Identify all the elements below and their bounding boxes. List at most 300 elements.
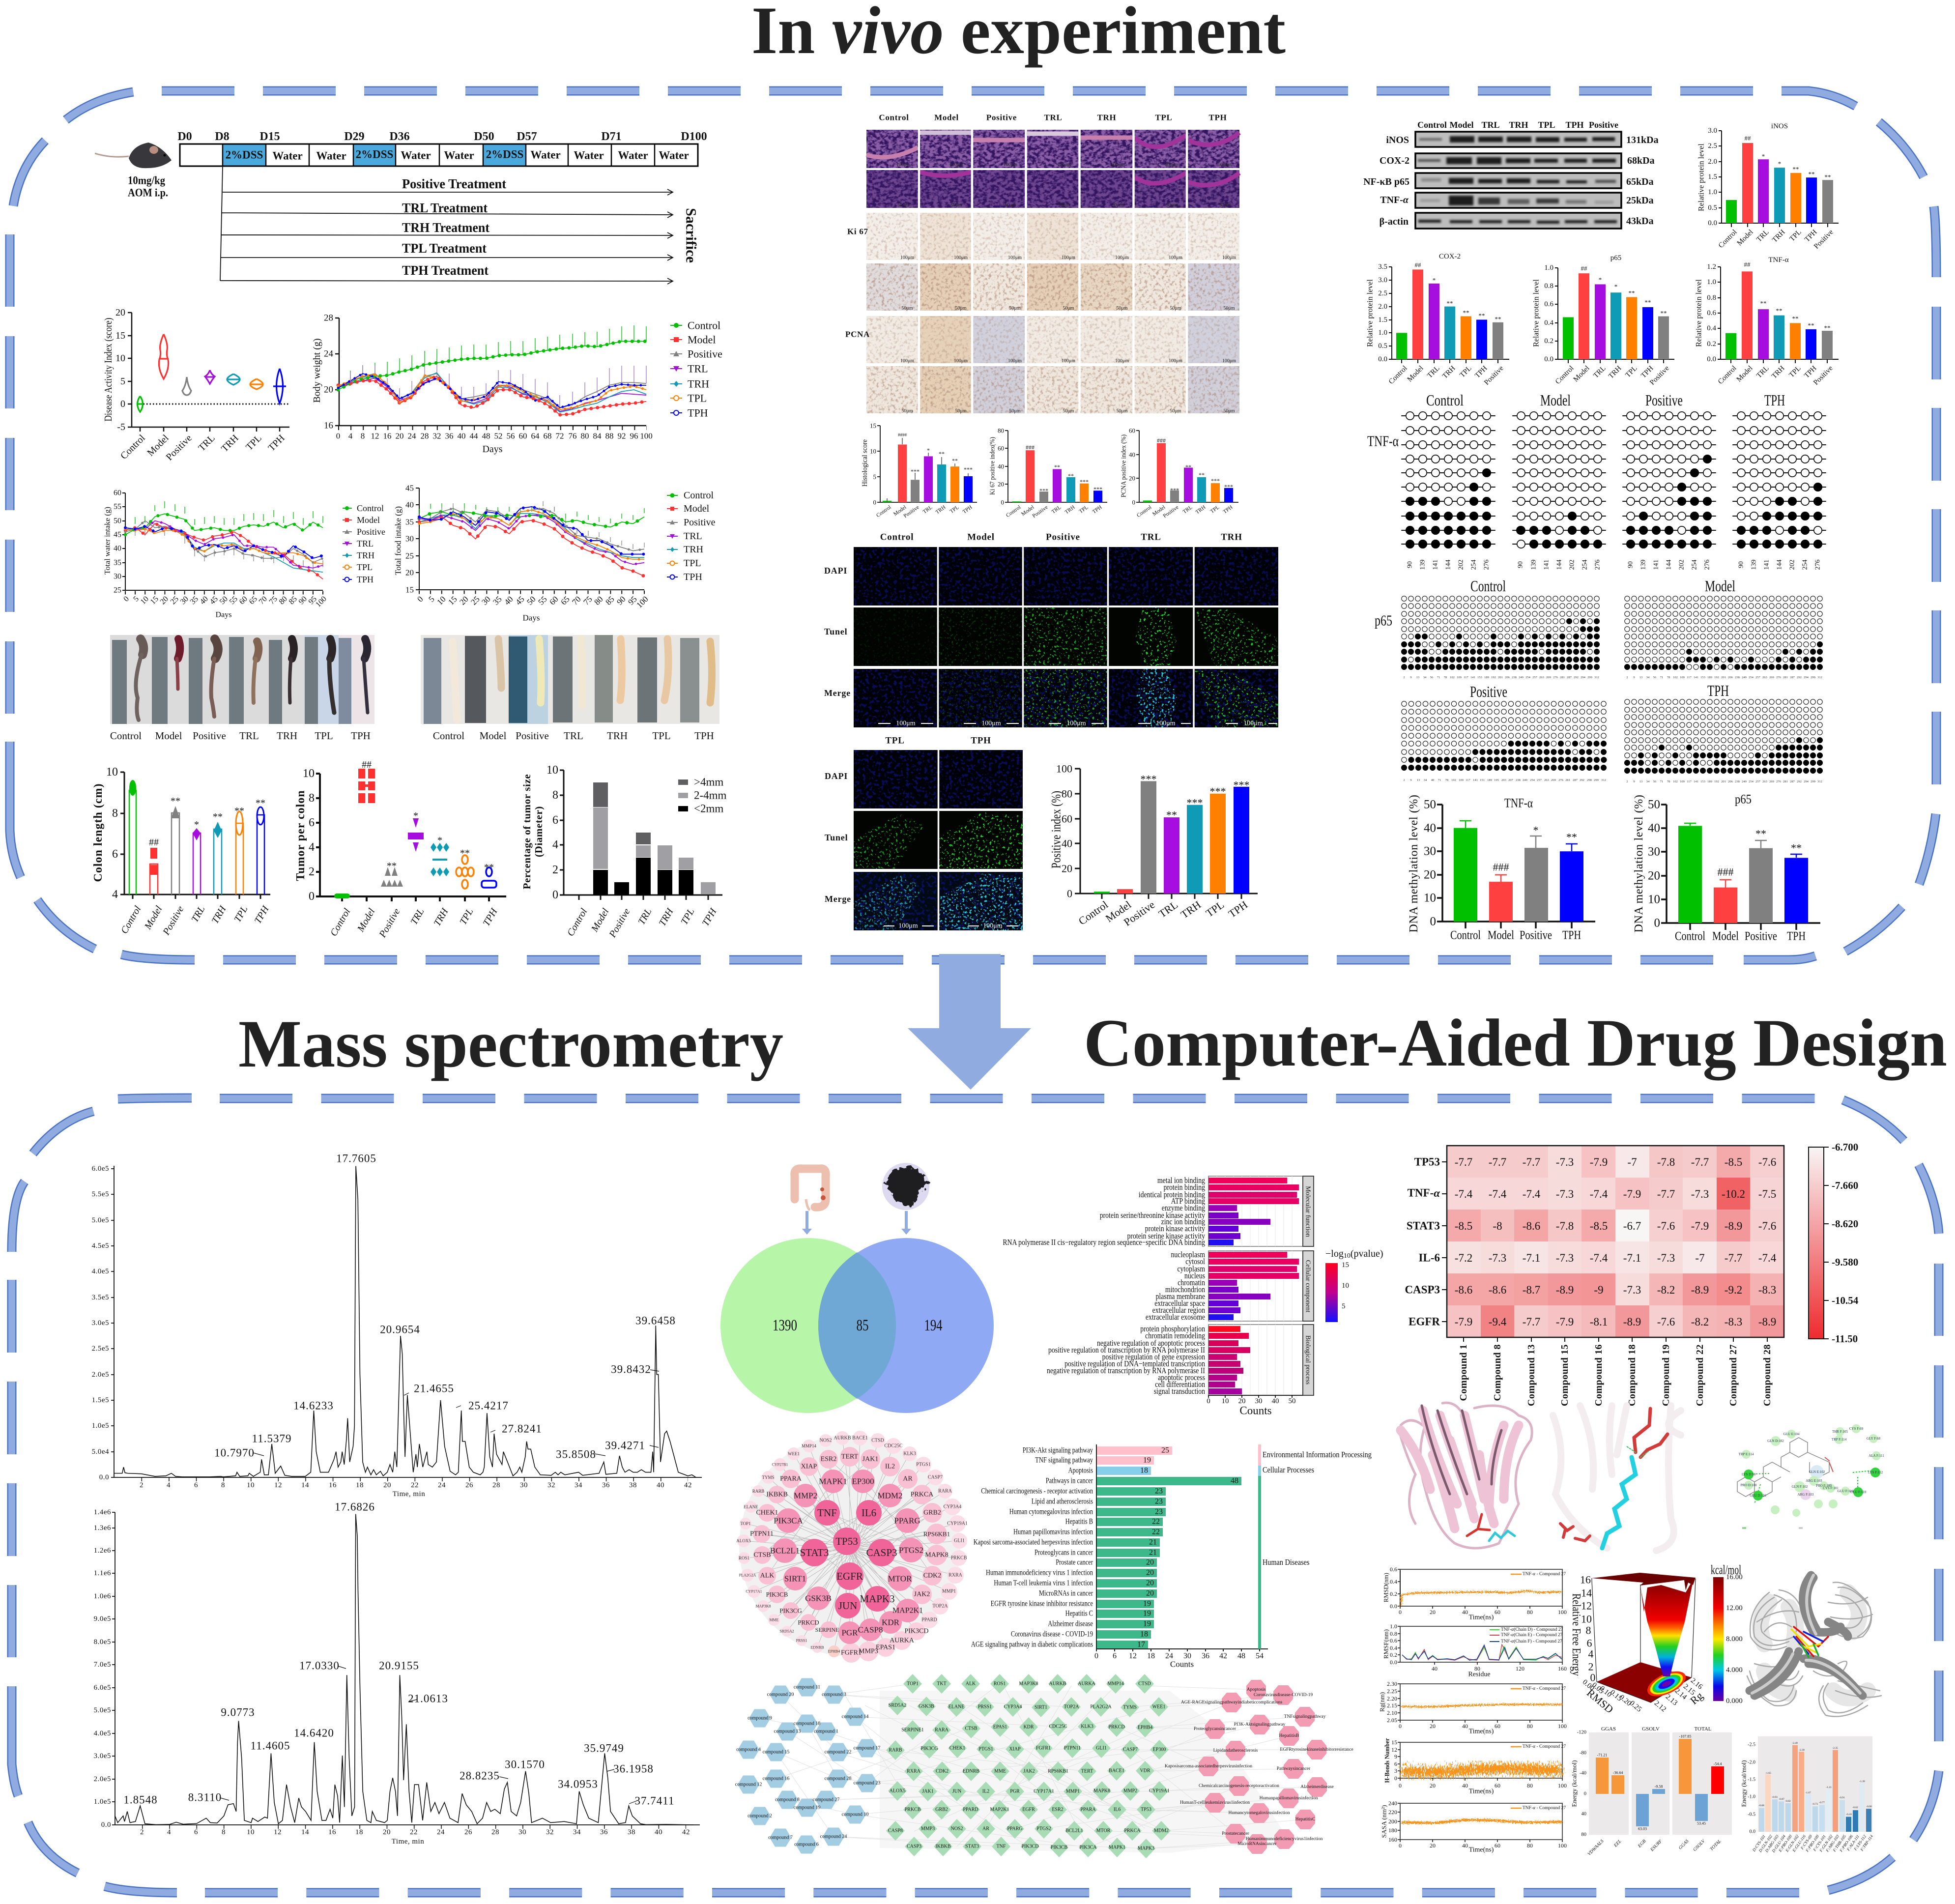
chart: body weight: 60 <box>519 432 527 440</box>
chart: per-residue energy decomposition: Energy (kcal/mol) <box>1740 1760 1748 1807</box>
panel: TUNEL fluorescence images, five groups: TRL <box>1141 532 1161 543</box>
chart: iNOS relative protein: ** <box>1824 173 1831 181</box>
chart: p65 relative protein: 1.0 <box>1544 264 1553 272</box>
chart: per-residue energy decomposition: F:CYS-69 <box>1799 1834 1813 1851</box>
chart: TNF-α DNA methylation level: Positive <box>1520 929 1552 942</box>
cell values: -8.3 <box>1725 1315 1742 1328</box>
chart: GO enrichment: Molecular function <box>1304 1186 1312 1237</box>
network: protein–protein interaction: JAK2 <box>914 1590 930 1598</box>
Venn diagram of targets: 1390 <box>773 1317 797 1334</box>
network: compound–target–pathway: ALK <box>966 1681 976 1687</box>
chart: body weight: 20 <box>395 432 404 440</box>
timeline bar: 2%DSS <box>356 148 393 160</box>
network: compound–target–pathway: PRKCD <box>1108 1724 1125 1730</box>
network: compound–target–pathway: GRB2 <box>935 1807 948 1813</box>
chart: SASA: 80 <box>1527 1842 1533 1849</box>
network: compound–target–pathway: PPARD <box>963 1807 978 1813</box>
chart: per-residue energy decomposition: -0.87 <box>1779 1798 1784 1801</box>
chart: colon length: TRL <box>189 904 207 924</box>
heatmap cells <box>1447 1146 1784 1337</box>
chart: p65 DNA methylation level: 0 <box>1654 916 1660 930</box>
chart: positive index: TPH <box>1226 898 1250 920</box>
column headers: TPL <box>1155 113 1173 122</box>
chart: Rg: 20 <box>1430 1723 1436 1730</box>
2D interaction diagram: CYS F:69 <box>1849 1427 1864 1431</box>
panel: western blots: Positive <box>1589 120 1618 130</box>
chart: Rg: 2.30 <box>1387 1680 1397 1687</box>
legend: food: TRH <box>684 544 703 555</box>
chart: p65 DNA methylation level: 40 <box>1648 822 1660 835</box>
site tick labels: 263 <box>1762 779 1767 783</box>
panel: western blots: COX-2 <box>1380 155 1409 166</box>
chart: GO enrichment: extracellular region <box>1152 1306 1205 1315</box>
chart: histological score: TPL <box>949 504 960 515</box>
chart: histological score: Control <box>875 504 892 519</box>
column labels: Compound 28 <box>1762 1344 1773 1406</box>
site tick labels: 13 <box>1639 675 1642 679</box>
values: 48 <box>1231 1476 1238 1485</box>
2D interaction diagram: ARG E:103 <box>1806 1479 1822 1483</box>
site tick labels: 269 <box>1551 779 1556 781</box>
network: protein–protein interaction: RPS6KB1 <box>923 1530 950 1537</box>
site tick labels: 276 <box>1553 675 1558 679</box>
chart: total food intake: 95 <box>626 594 639 607</box>
chart: TNF-α relative protein: 0.4 <box>1707 324 1716 332</box>
chart: MM/PBSA energy components: 0 <box>1584 1791 1586 1797</box>
chart: PCNA positive index: Positive <box>1162 504 1180 519</box>
panel: western blots: TRH <box>1509 120 1528 130</box>
network: compound–target–pathway: MDM2 <box>1154 1828 1169 1833</box>
site tick labels: 34 <box>1646 675 1650 679</box>
chart: TNF-α relative protein: Relative protein level <box>1695 279 1703 347</box>
chart: tumor size stacked bars: Control <box>565 906 590 938</box>
chart: total water intake: 70 <box>258 595 269 606</box>
peak labels: 14.6420 <box>294 1727 334 1739</box>
chart: total water intake: 5 <box>132 595 141 604</box>
chart: tumor per colon: 0 <box>309 890 315 903</box>
CpG site labels: 90 <box>1407 561 1413 568</box>
chart: free energy landscape: Relative Free Energy <box>1570 1593 1582 1676</box>
cell values: -8.2 <box>1691 1315 1709 1328</box>
peak labels: 17.6826 <box>335 1501 375 1513</box>
network: compound–target–pathway: EDNRB <box>963 1768 979 1774</box>
chart: free energy landscape: Rg <box>1688 1689 1705 1707</box>
network: compound–target–pathway: ELANE <box>949 1704 964 1709</box>
chart: disease activity index violin: Model <box>145 433 171 459</box>
network: compound–target–pathway: EP300 <box>1153 1747 1166 1753</box>
scale text: 50μm <box>897 202 909 207</box>
chart: tumor per colon <box>294 759 506 940</box>
chart: Ki 67 positive index: ** <box>1068 472 1074 479</box>
site tick labels: 192 <box>1714 675 1719 679</box>
2D interaction diagram: TRP E:114 <box>1739 1452 1754 1456</box>
chart: p65 relative protein: 0.4 <box>1544 319 1554 327</box>
site tick labels: 9 <box>1410 675 1412 679</box>
chart: mass spectrum 2: 1.2e6 <box>94 1547 111 1555</box>
chart: Ki 67 positive index: 80 <box>998 427 1004 434</box>
chart: MM/PBSA energy components: -9.58 <box>1655 1784 1663 1789</box>
column labels: Compound 16 <box>1593 1344 1604 1406</box>
panel: western blots: 65kDa <box>1626 176 1654 187</box>
values: 17 <box>1137 1641 1145 1648</box>
CpG site labels: 141 <box>1432 559 1439 570</box>
Venn diagram of targets <box>720 1163 994 1413</box>
panel: p65 bisulfite methylation lollipops: Model <box>1705 577 1735 595</box>
chart: histological score: TRL <box>922 504 934 515</box>
cell values: -8.5 <box>1455 1220 1472 1232</box>
network: compound–target–pathway: GSK3B <box>919 1703 934 1709</box>
chart: PCNA positive index: Control <box>1136 504 1152 519</box>
chart: tumor size stacked bars: (Diameter) <box>533 806 545 857</box>
network: protein–protein interaction: CASP7 <box>928 1474 943 1480</box>
treatment arrows <box>220 166 673 284</box>
network: compound–target–pathway: PRSS1 <box>978 1704 992 1709</box>
site tick labels: 276 <box>1776 779 1782 783</box>
chart: mass spectrum 1: 10 <box>247 1481 255 1489</box>
pathway nodes <box>1199 1680 1327 1854</box>
chart: per-residue energy decomposition: F:LYS-112 <box>1852 1834 1868 1852</box>
peak labels: 30.1570 <box>505 1759 545 1770</box>
chart: p65 relative protein: 0.8 <box>1544 282 1553 290</box>
chart: total food intake: Days <box>523 613 540 622</box>
chart: colon length: Positive <box>161 904 186 937</box>
chart: Rg: 0 <box>1399 1723 1402 1730</box>
chart: GO enrichment: protein phosphorylation <box>1140 1325 1205 1333</box>
chart: mass spectrum 2: 8 <box>222 1828 226 1836</box>
values: 22 <box>1152 1528 1160 1536</box>
chart: iNOS relative protein: Relative protein level <box>1697 144 1705 211</box>
chart: TNF-α relative protein: 0.0 <box>1707 355 1716 363</box>
CpG site labels: 254 <box>1802 559 1809 570</box>
chart: COX-2 relative protein: ## <box>1414 261 1421 268</box>
site tick labels: 249 <box>1742 779 1747 783</box>
cell values: -7.5 <box>1758 1187 1776 1200</box>
chart: mass spectrum 1: 42 <box>684 1481 692 1489</box>
p65 rows: open circles <box>1404 599 1820 771</box>
chart: Ki 67 positive index: 60 <box>998 444 1004 452</box>
cell values: -7.4 <box>1489 1187 1507 1200</box>
chart: p65 DNA methylation level: DNA methylation level (%) <box>1633 795 1645 932</box>
chart: body weight: 56 <box>506 432 515 440</box>
chart: disease activity index violin: 20 <box>115 307 125 318</box>
chart: histological score <box>861 422 977 519</box>
outer ring nodes <box>737 1431 967 1657</box>
network: protein–protein interaction: CDC25C <box>884 1443 903 1449</box>
chart: TNF-α relative protein: ** <box>1776 307 1782 315</box>
values: 20 <box>1146 1569 1154 1577</box>
chart: colon length: 10 <box>106 766 118 779</box>
network: compound–target–pathway: RARB <box>889 1748 902 1753</box>
Venn diagram of targets: 85 <box>856 1317 869 1334</box>
chart: mass spectrum 1: 2 <box>140 1481 144 1489</box>
chart: MM/PBSA energy components: 40 <box>1581 1812 1586 1817</box>
network: compound–target–pathway: EPAS1 <box>993 1724 1007 1730</box>
chart: KEGG pathways: 54 <box>1256 1651 1264 1660</box>
pathway names: Prostate cancer <box>1056 1558 1093 1567</box>
column labels: Compound 18 <box>1627 1344 1638 1406</box>
site tick labels: 312 <box>1817 675 1822 679</box>
chart: iNOS relative protein <box>1697 122 1839 251</box>
panel: western blots: TNF-α <box>1380 195 1409 205</box>
site tick labels: 13 <box>1417 779 1420 781</box>
network: compound–target–pathway: AURKB <box>1049 1681 1066 1687</box>
cell values: -7.7 <box>1523 1315 1540 1328</box>
scale text: 50μm <box>1009 408 1021 414</box>
site tick labels: 276 <box>1776 675 1782 679</box>
chart: histological score: 5 <box>873 473 876 481</box>
peak labels: 9.0773 <box>221 1706 255 1718</box>
2D interaction diagram: GLN E:102 <box>1809 1470 1825 1474</box>
network: compound–target–pathway: PLA2G2A <box>1090 1704 1112 1709</box>
chart: MM/PBSA energy components <box>1571 1726 1732 1857</box>
panel: p65 bisulfite methylation lollipops: p65 <box>1375 611 1392 629</box>
cellular component bars <box>1208 1252 1299 1320</box>
chart: total water intake: Days <box>216 610 231 619</box>
chart: per-residue energy decomposition: F:PRO-100 <box>1804 1834 1820 1853</box>
network: compound–target–pathway: EGFR <box>1022 1807 1035 1813</box>
column labels: Compound 8 <box>1492 1344 1503 1401</box>
network: compound–target–pathway: PTPN11 <box>1064 1746 1081 1751</box>
site tick labels: 292 <box>1797 675 1802 679</box>
chart: Rg: 2.05 <box>1387 1717 1397 1724</box>
pathway names: PI3K-Akt signaling pathway <box>1023 1446 1093 1455</box>
pathway names: Apoptosis <box>1068 1466 1093 1475</box>
network: compound–target–pathway: compound 17 <box>854 1746 880 1751</box>
site tick labels: 34 <box>1424 779 1427 781</box>
values: 23 <box>1155 1487 1163 1495</box>
scale text: 100μm <box>896 162 910 167</box>
panel: TUNEL fluorescence images, five groups: 100μm <box>1066 720 1086 727</box>
column headers <box>879 113 1227 122</box>
network: compound–target–pathway: IKBKB <box>935 1844 951 1849</box>
chart: per-residue energy decomposition: -1.07 <box>1805 1791 1811 1794</box>
chart: Rg: 80 <box>1527 1723 1533 1730</box>
axis <box>1096 1444 1268 1651</box>
values: 21 <box>1149 1548 1157 1557</box>
CpG site labels: 254 <box>1691 559 1698 570</box>
chart: body weight: 24 <box>408 432 416 440</box>
network: compound–target–pathway: PIK3CA <box>1079 1845 1097 1850</box>
chart: mass spectrum 1: 26 <box>465 1481 473 1489</box>
chart: total water intake: 35 <box>114 558 121 567</box>
panel: western blots: TRL <box>1481 120 1500 130</box>
chart: mass spectrum 2: 16 <box>328 1828 336 1836</box>
site tick labels: 78 <box>1445 779 1448 781</box>
network: compound–target–pathway: MMP3 <box>921 1826 935 1831</box>
legend: tumor size <box>678 776 727 815</box>
color legend: 10 <box>1342 1282 1349 1290</box>
chart: free energy landscape: 8 <box>1585 1624 1591 1637</box>
chart: total water intake: 60 <box>114 489 121 497</box>
chart: body weight: 68 <box>544 432 551 440</box>
chart: MM/PBSA energy components: VDWAALS <box>1587 1839 1605 1857</box>
chart: tumor size stacked bars: Model <box>589 906 611 934</box>
chart: positive index: 60 <box>1062 813 1072 825</box>
chart: COX-2 relative protein: ** <box>1463 309 1469 317</box>
chart: histological score: 15 <box>870 422 876 430</box>
chart: RMSF: TNF-α(Chain E) - Compound 27 <box>1501 1632 1563 1638</box>
network: compound–target–pathway <box>735 1674 1353 1858</box>
values: 18 <box>1140 1467 1148 1474</box>
network: compound–target–pathway: AURKA <box>1078 1681 1096 1687</box>
site tick labels: 102 <box>1673 779 1678 783</box>
cell values: -7.7 <box>1691 1156 1709 1168</box>
chart: PCNA positive index <box>1121 427 1238 519</box>
chart: TNF-α relative protein: Model <box>1735 364 1754 383</box>
panel: western blots: 43kDa <box>1626 216 1654 227</box>
network: compound–target–pathway: TNFsignalingpathway <box>1284 1714 1326 1719</box>
chart: disease activity index violin: 15 <box>115 330 125 341</box>
day labels <box>177 130 707 143</box>
chart: GO enrichment: 20 <box>1238 1397 1245 1405</box>
heading: Computer-Aided Drug Design: Computer-Aided Drug Design <box>1084 1005 1947 1080</box>
chart: body weight: 16 <box>383 432 391 440</box>
chart: iNOS relative protein: 0.5 <box>1708 204 1717 212</box>
cell values: -7.7 <box>1455 1156 1472 1168</box>
chart: GO enrichment: 50 <box>1289 1397 1295 1405</box>
chart: colon length: ** <box>234 806 244 816</box>
energy color scale: 12.00 <box>1726 1604 1743 1612</box>
day labels: D100 <box>681 130 707 143</box>
chart: body weight: 52 <box>494 432 502 440</box>
cell values: -8.6 <box>1523 1220 1540 1232</box>
site tick labels: 269 <box>1546 675 1551 679</box>
cell values: -7 <box>1627 1156 1637 1168</box>
energy color scale: kcal/mol <box>1711 1563 1741 1577</box>
chart: MM/PBSA energy components: ESURF <box>1649 1839 1664 1853</box>
site tick labels: 281 <box>1783 675 1788 679</box>
chart: total food intake: 70 <box>570 594 583 607</box>
heatmap color scale: -6.700 <box>1832 1141 1858 1153</box>
color legend: 5 <box>1342 1302 1346 1310</box>
treatment labels: TPH Treatment <box>402 263 489 278</box>
network: compound–target–pathway: WEE1 <box>1152 1704 1165 1709</box>
cell values: -7.3 <box>1691 1187 1709 1200</box>
chart: free energy landscape <box>1570 1563 1743 1716</box>
cell values: -7.7 <box>1523 1156 1540 1168</box>
pathway names: Proteoglycans in cancer <box>1035 1548 1093 1557</box>
network: protein–protein interaction: ROS1 <box>739 1556 749 1560</box>
cell values: -7.4 <box>1523 1187 1541 1200</box>
chart: MM/PBSA energy components: -120 <box>1577 1730 1586 1735</box>
peak labels: 39.6458 <box>635 1314 676 1327</box>
chart: SASA: 40 <box>1462 1842 1468 1849</box>
site tick labels: 109 <box>1680 675 1685 679</box>
chart: RMSF: 1.0 <box>1390 1623 1397 1630</box>
chart: COX-2 relative protein: TRH <box>1441 364 1457 380</box>
chart: TNF-α relative protein: 1.2 <box>1707 263 1716 271</box>
network: compound–target–pathway: MMP1 <box>1066 1789 1080 1794</box>
network: compound–target–pathway: PTGS1 <box>978 1747 993 1752</box>
protein–ligand close-up <box>1553 1406 1681 1551</box>
protein structure: superposed trajectory frames <box>1747 1575 1881 1716</box>
network: compound–target–pathway: PI3K-Aktsignalingpathway <box>1234 1722 1285 1727</box>
scale text: 100μm <box>949 162 963 167</box>
chart: total water intake: 25 <box>114 586 121 595</box>
chart: tumor size stacked bars: 6 <box>552 814 558 827</box>
chart: mass spectrum 1: 4.5e5 <box>92 1242 109 1250</box>
chart: total water intake: 25 <box>169 595 180 606</box>
chart: COX-2 relative protein: Control <box>1387 364 1409 386</box>
2D interaction diagram: ALA F:111 <box>1869 1454 1884 1458</box>
chart: MM/PBSA energy components: -54.4 <box>1714 1761 1722 1766</box>
pathway names: Hepatitis B <box>1065 1517 1093 1526</box>
network: protein–protein interaction: ALOX5 <box>736 1538 751 1543</box>
column headers: TRH <box>1097 113 1116 122</box>
chart: free energy landscape: 12 <box>1581 1599 1592 1612</box>
panel: histology and immunohistochemistry images <box>845 113 1239 415</box>
chart: body weight: 92 <box>617 432 626 440</box>
chart: per-residue energy decomposition: -0.73 <box>1812 1803 1818 1806</box>
cell values: -8.6 <box>1455 1284 1472 1296</box>
chart: SASA: 60 <box>1495 1842 1500 1849</box>
chart: SASA: SASA (nm²) <box>1380 1805 1388 1838</box>
network: protein–protein interaction: TNF <box>817 1507 837 1519</box>
site tick labels: 192 <box>1491 675 1496 679</box>
chart: Ki 67 positive index: 20 <box>998 481 1004 488</box>
row labels: TP53 <box>1414 1156 1440 1168</box>
row labels: PCNA <box>845 329 870 339</box>
network: compound–target–pathway: compound 27 <box>813 1797 839 1803</box>
energy color scale: 4.000 <box>1726 1666 1743 1674</box>
chart: mass spectrum 1: 1.0e5 <box>92 1422 109 1430</box>
network: protein–protein interaction: GLI1 <box>954 1538 965 1543</box>
network: protein–protein interaction: SRD5A2 <box>779 1629 794 1634</box>
chart: p65 relative protein: TRH <box>1607 364 1623 380</box>
site tick labels: 201 <box>1721 675 1726 679</box>
photo panel: colons with rulers (unopened) <box>110 635 374 724</box>
network: compound–target–pathway: compound 22 <box>825 1750 851 1755</box>
peak labels <box>123 1501 674 1807</box>
CpG site labels: 276 <box>1814 559 1821 570</box>
chart: tumor per colon: 6 <box>309 816 315 829</box>
CpG site labels: 139 <box>1419 559 1426 570</box>
site tick labels: 263 <box>1762 675 1767 679</box>
network: protein–protein interaction: MDM2 <box>877 1491 903 1500</box>
peak labels: 10.7970 <box>214 1447 255 1459</box>
2D interaction diagram: GLU E:104 <box>1783 1432 1800 1436</box>
cell values: -7.9 <box>1590 1156 1608 1168</box>
chart: per-residue energy decomposition: -0.43 <box>1846 1813 1852 1816</box>
photo panel: opened colons with rulers <box>421 635 719 724</box>
CpG site labels: 144 <box>1776 559 1783 570</box>
open circles <box>1402 416 1826 544</box>
chart: RMSF: 0.6 <box>1390 1637 1397 1644</box>
treatment labels: TRH Treatment <box>402 220 489 235</box>
chart: mass spectrum 2: 1.0e6 <box>94 1592 111 1600</box>
labels: colon photos: TPH <box>351 730 371 742</box>
network: protein–protein interaction: EDNRB <box>810 1645 824 1649</box>
chart: mass spectrum 2: 20 <box>383 1828 391 1836</box>
scale text: 100μm <box>1169 255 1182 260</box>
compound nodes <box>738 1678 878 1854</box>
chart: PCNA positive index: ### <box>1157 437 1166 444</box>
chart: total water intake: 50 <box>218 595 230 606</box>
chart: body weight: 80 <box>581 432 589 440</box>
pathway names: Kaposi sarcoma-associated herpesvirus infection <box>974 1538 1093 1547</box>
chart: tumor per colon: ** <box>460 848 470 859</box>
site tick labels: 298 <box>1587 779 1592 781</box>
chart: COX-2 relative protein: TPH <box>1473 364 1489 380</box>
network: compound–target–pathway: PIK3CB <box>1051 1845 1068 1850</box>
category strip: Cellular Processes <box>1263 1466 1314 1474</box>
chart: COX-2 relative protein: Model <box>1406 364 1425 383</box>
chart: mass spectrum 2: 8.0e5 <box>94 1638 111 1646</box>
network: compound–target–pathway: compound 3 <box>822 1692 846 1698</box>
chart: TNF-α DNA methylation level: TPH <box>1562 929 1581 942</box>
panel: western blots: TPH <box>1565 120 1584 130</box>
chart: RMSF: 0.0 <box>1390 1659 1397 1666</box>
